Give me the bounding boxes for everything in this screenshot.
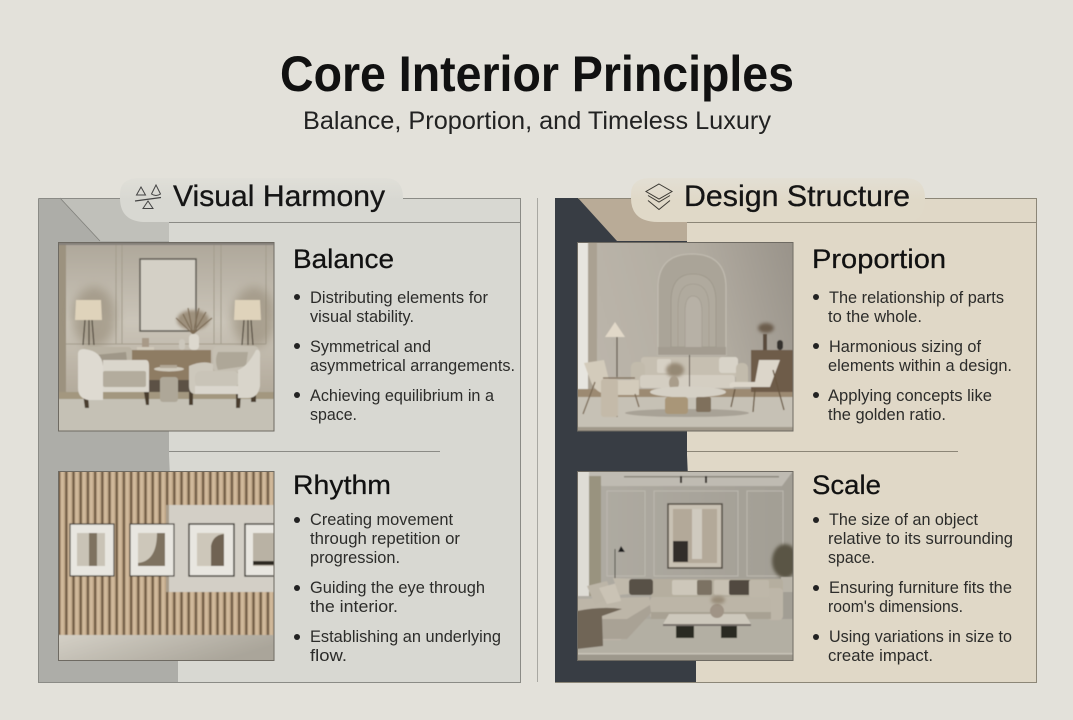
frames xyxy=(70,524,114,576)
coffee table xyxy=(663,614,751,624)
panel: design structure xyxy=(555,178,1036,682)
floor xyxy=(577,389,793,397)
left chair xyxy=(584,360,639,395)
text block: proportion: Harmonious sizing of xyxy=(829,338,981,356)
text block: balance: space. xyxy=(310,406,357,424)
sofa xyxy=(641,357,738,377)
text block: rhythm: progression. xyxy=(310,549,400,567)
text block: rhythm: Rhythm xyxy=(293,470,391,500)
floor lamp xyxy=(605,322,625,337)
left chair xyxy=(83,392,149,408)
section heading: design structure: Design Structure xyxy=(684,180,910,213)
photo: proportion room xyxy=(577,242,793,432)
text block: rhythm: Guiding the eye through xyxy=(310,579,485,597)
text block: proportion: Applying concepts like xyxy=(828,387,992,405)
panel: visual harmony xyxy=(38,178,520,682)
text block: proportion: elements within a design. xyxy=(828,357,1012,375)
sideboard and decor xyxy=(751,350,793,392)
text block: scale: create impact. xyxy=(828,647,933,665)
text block: balance: Achieving equilibrium in a xyxy=(310,387,495,405)
text block: rhythm: through repetition or xyxy=(310,530,461,548)
right chair xyxy=(189,392,256,408)
sectional sofa xyxy=(652,579,781,597)
text block: scale: Ensuring furniture fits the xyxy=(829,579,1012,597)
title: Core Interior Principles xyxy=(280,46,794,102)
text block: scale xyxy=(812,470,1013,665)
photo: balance room xyxy=(58,242,276,432)
cushions xyxy=(587,582,608,598)
text block: rhythm: Establishing an underlying xyxy=(310,628,501,646)
text block: balance: Symmetrical and xyxy=(310,338,431,356)
text block: balance: Balance xyxy=(293,244,394,274)
arch niche xyxy=(658,254,726,355)
text block: scale: relative to its surrounding xyxy=(828,530,1013,548)
side table xyxy=(160,377,178,402)
photo: rhythm wall xyxy=(58,471,279,661)
text block: proportion: The relationship of parts xyxy=(829,289,1004,307)
text block: balance: visual stability. xyxy=(310,308,414,326)
icon: balance scale xyxy=(135,185,161,208)
text block: scale: Scale xyxy=(812,470,881,500)
throw blanket xyxy=(577,608,622,649)
text block: proportion: Proportion xyxy=(812,244,946,274)
text block: rhythm: flow. xyxy=(310,647,347,665)
text block: scale: room's dimensions. xyxy=(828,598,963,616)
section heading: visual harmony xyxy=(120,178,403,222)
plant xyxy=(772,544,798,578)
text block: rhythm xyxy=(293,470,501,665)
lamps xyxy=(75,300,102,320)
text block: proportion: to the whole. xyxy=(828,308,922,326)
floor lamp xyxy=(614,549,616,579)
right chair xyxy=(730,360,780,387)
text block: balance: Distributing elements for xyxy=(310,289,488,307)
floor xyxy=(577,619,793,654)
coffee table xyxy=(650,386,726,398)
text block: balance xyxy=(293,244,515,424)
photo: scale living room xyxy=(577,471,798,661)
plant and vases xyxy=(177,310,209,330)
text block: proportion xyxy=(812,244,1012,424)
section heading: design structure xyxy=(631,178,925,222)
section heading: visual harmony: Visual Harmony xyxy=(173,180,385,213)
icon: layers xyxy=(646,184,672,210)
text block: scale: space. xyxy=(828,549,875,567)
text block: scale: The size of an object xyxy=(829,511,978,529)
text block: balance: asymmetrical arrangements. xyxy=(310,357,515,375)
text block: proportion: the golden ratio. xyxy=(828,406,946,424)
text block: rhythm: the interior. xyxy=(310,598,398,616)
text block: scale: Using variations in size to xyxy=(829,628,1012,646)
subtitle: Balance, Proportion, and Timeless Luxury xyxy=(303,107,771,135)
plant on table xyxy=(666,363,684,377)
text block: rhythm: Creating movement xyxy=(310,511,453,529)
